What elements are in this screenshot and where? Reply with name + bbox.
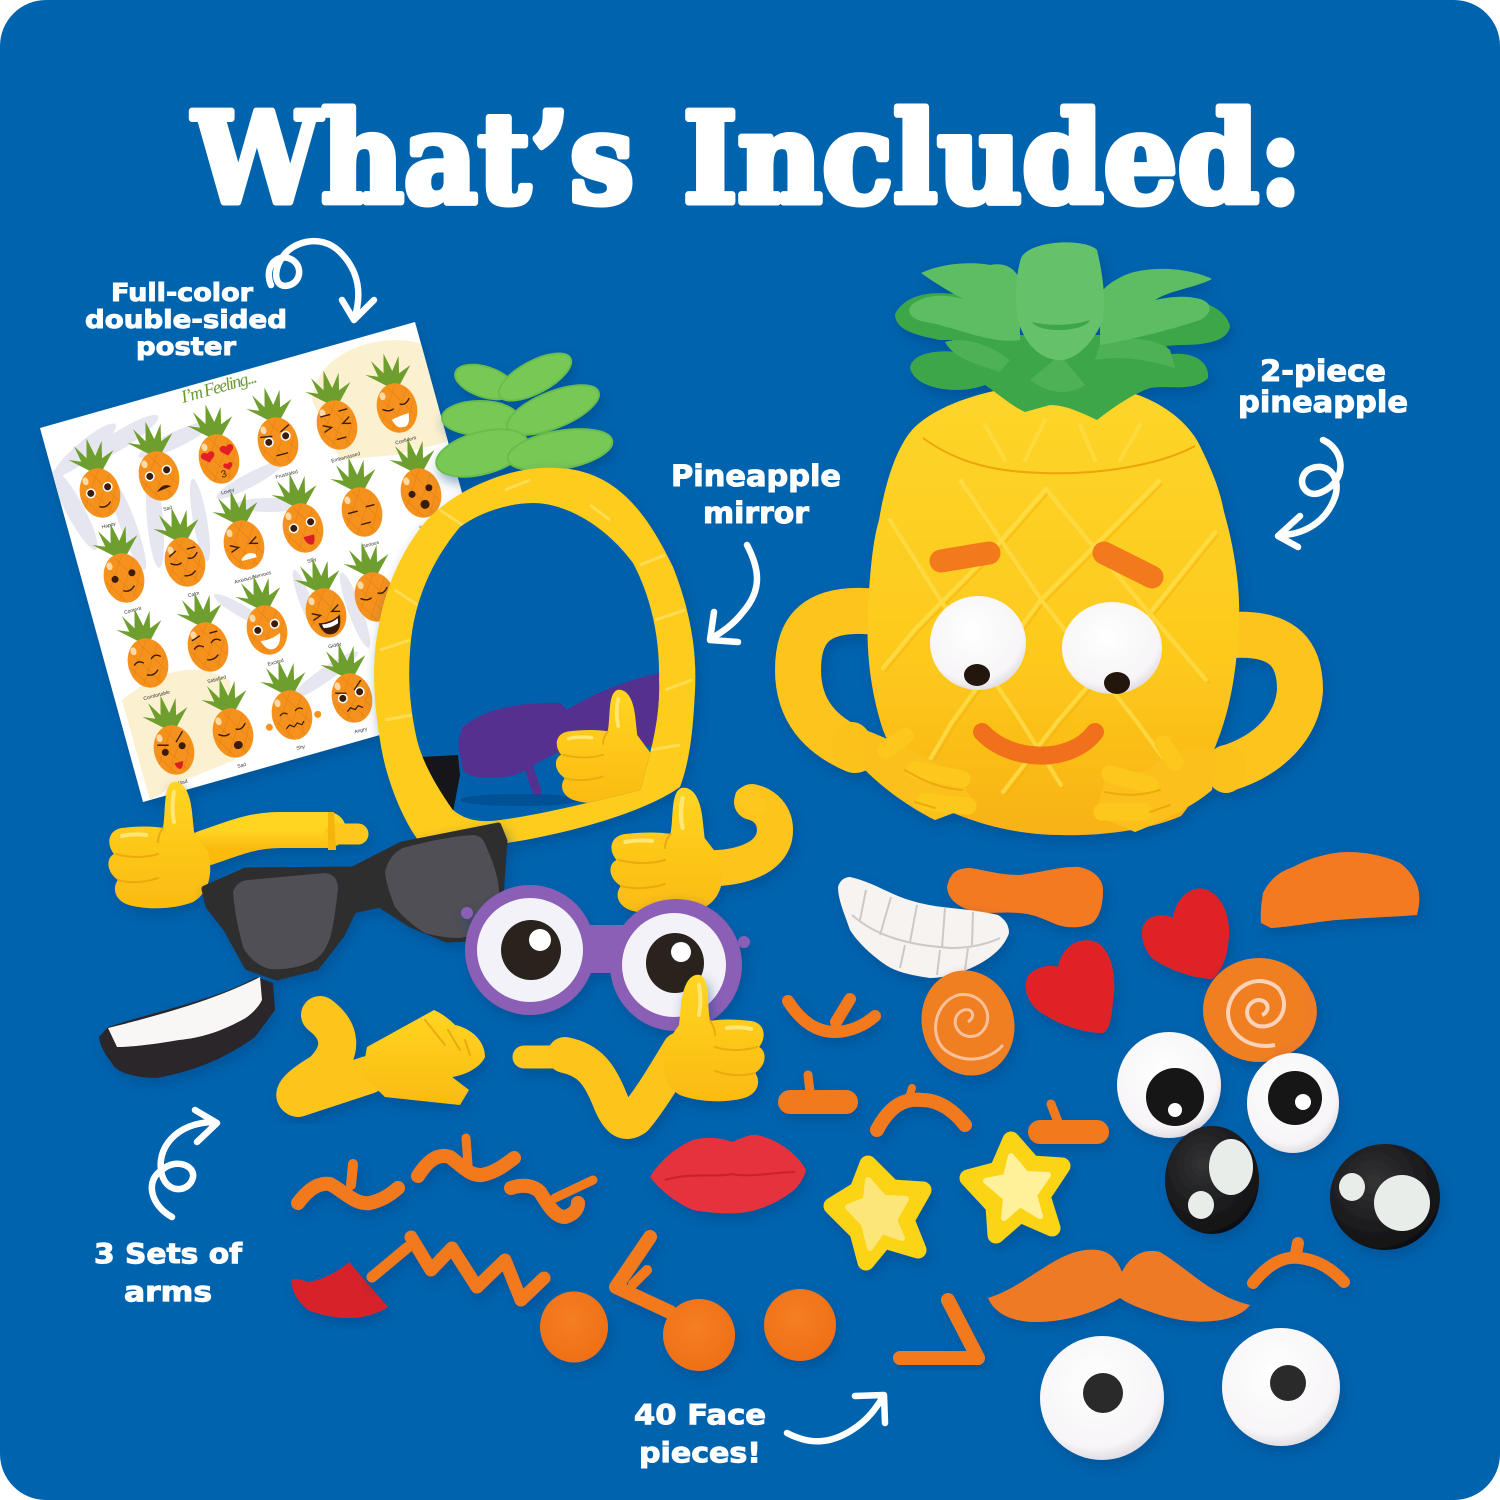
arrow: to face pieces — [787, 1395, 885, 1441]
pineapple arms — [798, 611, 1300, 768]
title: What’s — [191, 86, 634, 232]
poster heading: I’m Feeling... — [178, 366, 259, 407]
small orange brow pieces — [298, 999, 1344, 1283]
label: 3 sets of arms — [94, 1237, 243, 1308]
poster pineapple faces: Mad — [177, 779, 188, 787]
left hand — [832, 722, 975, 820]
poster pineapple faces: Surprised — [419, 520, 441, 532]
zigzag mouth — [372, 1237, 544, 1300]
poster pineapple faces: Comfortable — [143, 689, 171, 702]
googly eye: white with black right — [1247, 1053, 1339, 1153]
label: poster: double-sided — [85, 305, 287, 334]
star: left — [832, 1164, 923, 1262]
panel: feelings poster — [40, 322, 464, 807]
label: 2-piece pineapple — [1238, 354, 1408, 419]
label: 3 sets of arms: arms — [124, 1275, 212, 1308]
label: poster: poster — [136, 332, 237, 361]
poster pineapple faces: Sad — [163, 505, 173, 513]
spiral eye: left — [910, 960, 1026, 1086]
label: pineapple mirror: mirror — [703, 496, 810, 530]
arm: bent with open hand — [295, 1010, 485, 1105]
red tongue mouth — [291, 1262, 388, 1318]
red lips — [650, 1135, 806, 1213]
black sunglasses — [205, 826, 504, 977]
black eye: right — [1330, 1144, 1440, 1250]
arm: thumbs-up bent arm — [610, 788, 775, 914]
crown leaves — [895, 242, 1230, 420]
black and white mouth — [99, 977, 275, 1078]
left eye — [930, 596, 1026, 690]
poster pineapple faces: Happy — [101, 521, 117, 531]
orange mustache — [988, 1250, 1250, 1322]
label: 3 sets of arms: 3 Sets of — [94, 1237, 243, 1270]
poster pineapple faces: Content — [124, 606, 143, 616]
poster pineapple faces: Excited — [267, 658, 285, 668]
poster pineapple faces: Serious — [362, 540, 380, 550]
label: 2-piece pineapple: 2-piece — [1260, 354, 1386, 388]
arrow: to mirror — [710, 545, 757, 642]
right eye — [1062, 602, 1162, 694]
label: pineapple mirror: Pineapple — [671, 459, 841, 493]
panel: pineapple mirror — [374, 344, 695, 845]
smile — [982, 732, 1095, 756]
mirror glass — [409, 503, 659, 821]
poster pineapple faces: Confident — [395, 435, 418, 447]
pineapple diamond pattern — [883, 420, 1218, 795]
poster leaf decoration — [46, 340, 455, 800]
crown back lobes — [895, 293, 1230, 420]
label: face pieces: 40 Face — [634, 1398, 766, 1431]
arrow: to arms — [152, 1110, 217, 1217]
label: 2-piece pineapple: pineapple — [1238, 385, 1408, 419]
star: right — [968, 1140, 1062, 1235]
mirror leaves — [431, 344, 615, 485]
big googly eye: right — [1222, 1328, 1340, 1446]
poster pineapple faces: Frustrated — [275, 469, 299, 481]
arm: thumbs-up with pointing hand — [108, 782, 358, 908]
label: face pieces — [634, 1398, 766, 1469]
teeth mouth — [838, 877, 1009, 978]
googly eye: white with black left — [1117, 1032, 1221, 1138]
poster pineapple faces: Embarrassed — [331, 451, 361, 465]
poster pineapple faces: Calm — [187, 590, 200, 599]
poster pineapple faces: Satisfied — [207, 674, 227, 685]
corner brow piece — [900, 1300, 978, 1358]
mirror reflection — [421, 673, 662, 812]
label: poster: Full-color — [111, 278, 254, 307]
big googly eye: left — [1040, 1336, 1164, 1460]
heart: left — [1026, 940, 1114, 1033]
arrow: to pineapple — [1278, 440, 1341, 547]
poster pineapple faces — [64, 348, 454, 791]
poster pineapple faces: Silly — [307, 557, 317, 565]
right hand — [1095, 744, 1246, 832]
label: poster — [85, 278, 287, 361]
panel: 2-piece pineapple — [798, 242, 1300, 835]
orange peanut mustache — [947, 867, 1103, 927]
title: Included: — [683, 86, 1302, 232]
heart: right — [1142, 889, 1229, 979]
mirror frame ridges — [380, 480, 692, 750]
orange dots and check piece — [540, 1237, 836, 1371]
spiral eye: right — [1203, 958, 1315, 1062]
label: face pieces: pieces! — [639, 1436, 761, 1469]
orange half-circle mouth — [1261, 852, 1419, 928]
poster pineapple faces: Shy — [296, 744, 306, 752]
arm: zigzag with thumbs-up — [524, 975, 765, 1121]
label: pineapple mirror — [671, 459, 841, 530]
poster pineapple faces: Angry — [354, 726, 368, 735]
poster pineapple faces: Sad — [237, 762, 247, 770]
poster pineapple faces: Giddy — [328, 641, 342, 650]
black eye: left — [1165, 1126, 1259, 1234]
poster pineapple faces: Lovey — [221, 487, 236, 496]
title — [191, 86, 1302, 232]
mirror frame — [374, 468, 695, 845]
poster pineapple faces: 3 — [220, 469, 229, 481]
purple eye glasses — [461, 885, 750, 1031]
poster pineapple faces: Anxious/Nervous — [234, 570, 272, 586]
arrow: to poster — [269, 241, 374, 320]
pineapple lid seam — [923, 438, 1195, 473]
eyebrows — [941, 553, 1152, 577]
pineapple body — [868, 384, 1239, 835]
